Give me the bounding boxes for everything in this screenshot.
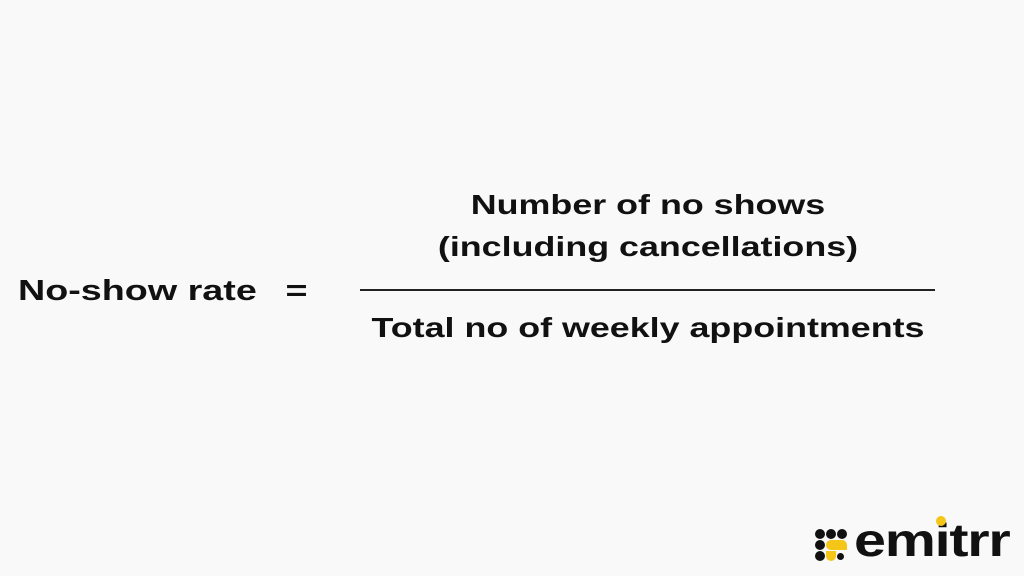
logo: emitrr [815,514,1010,566]
icon: yellow dot [936,516,946,526]
wordmark: emitrr [854,514,1009,566]
fraction line [360,289,935,291]
equals sign: = [285,275,307,307]
icon: dot grid [815,529,847,561]
label: no-show rate: No-show rate [18,275,257,307]
numerator: Number of no shows [471,189,825,220]
formula [18,189,935,343]
numerator [438,189,858,262]
denominator: Total no of weekly appointments [372,312,924,343]
numerator: (including cancellations) [438,231,858,262]
